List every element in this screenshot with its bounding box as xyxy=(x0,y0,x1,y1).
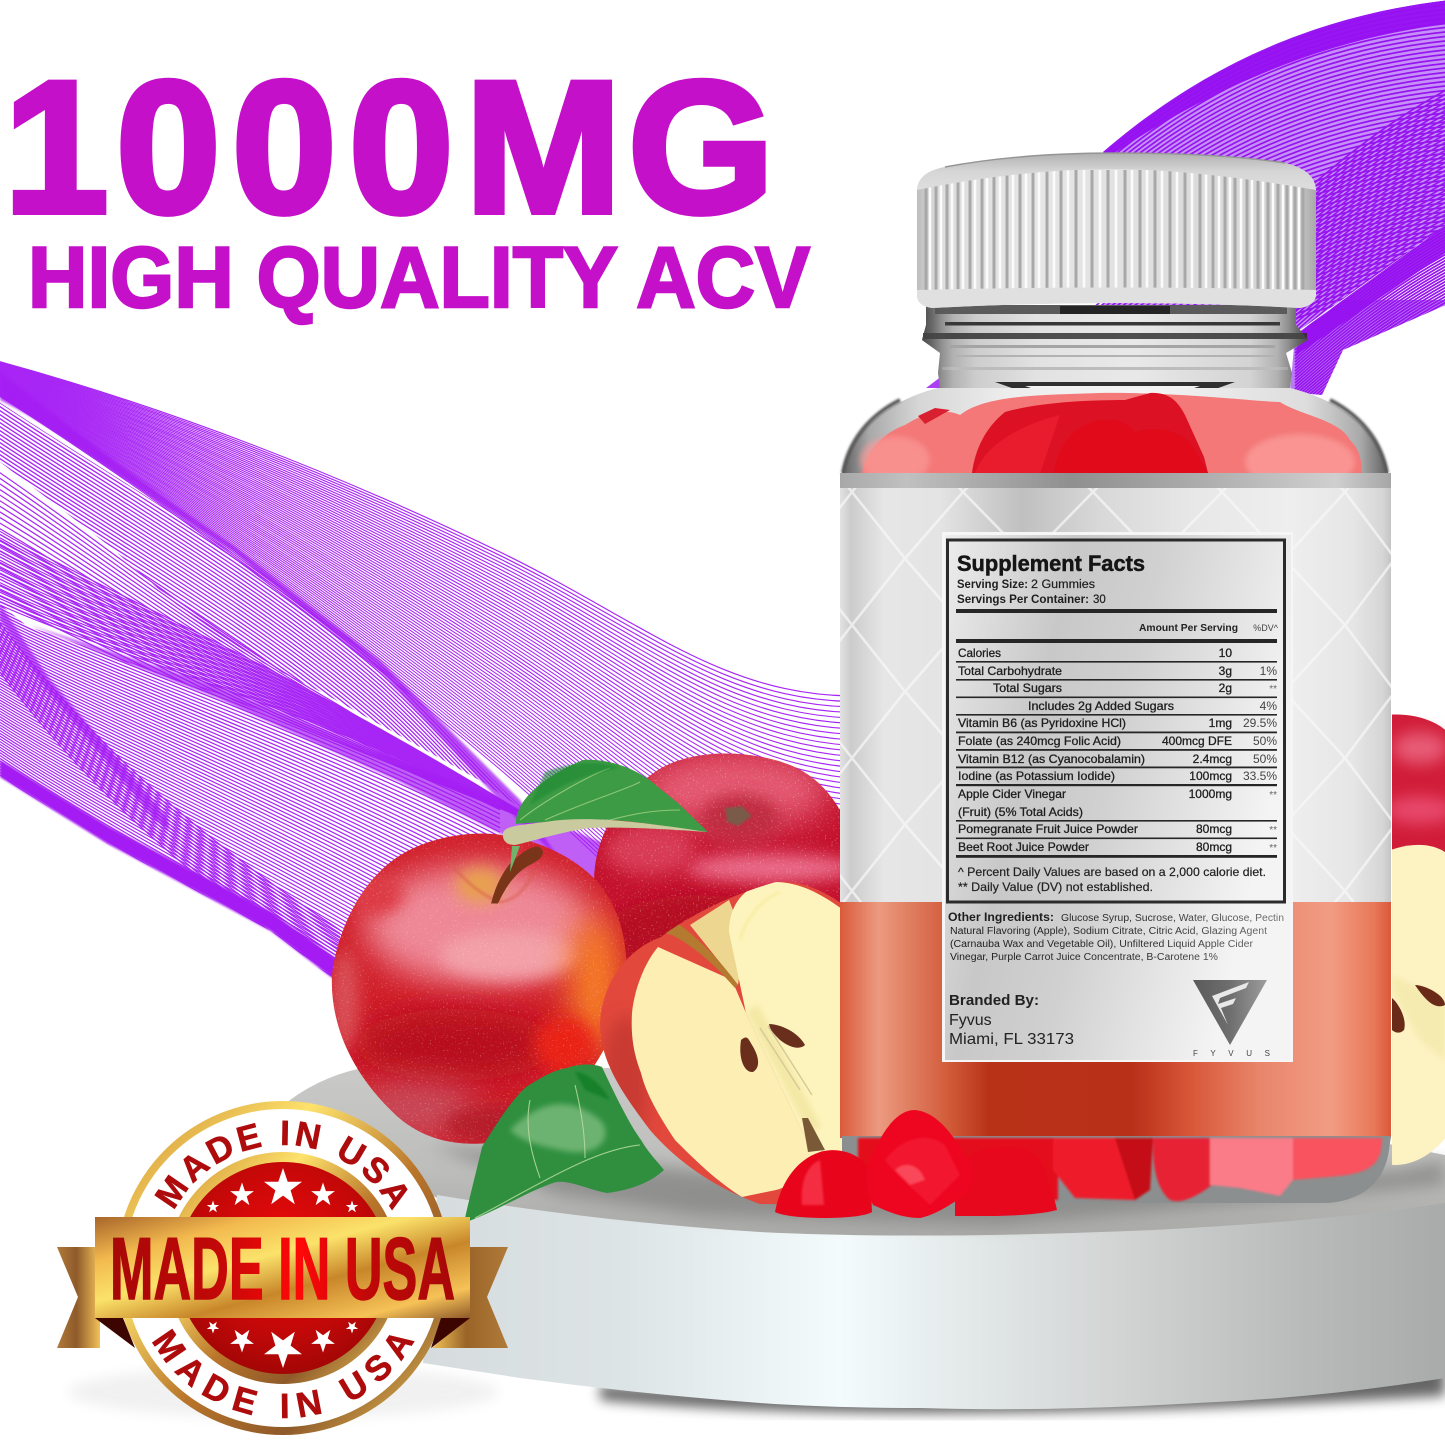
leaf petiole xyxy=(503,819,708,845)
platform shadow xyxy=(600,1365,1445,1413)
label lower colour band xyxy=(840,902,1391,1138)
cap ribs xyxy=(926,170,1303,292)
table rows: 100mcg xyxy=(1189,769,1232,783)
halved apple flesh xyxy=(632,947,813,1197)
branded by: Miami, FL 33173 xyxy=(949,1031,1074,1048)
supplement facts box: 30 xyxy=(1093,594,1106,606)
purple wave ribbons, left xyxy=(0,361,840,980)
table rows: Vitamin B12 (as Cyanocobalamin) xyxy=(958,752,1145,766)
table rows: (Fruit) (5% Total Acids) xyxy=(958,805,1083,819)
table rows: ** xyxy=(1269,843,1277,854)
stem xyxy=(666,924,738,988)
other ingredients: (Carnauba Wax and Vegetable Oil), Unfiltered Liquid Apple Cider xyxy=(950,939,1254,950)
apple: halved apple xyxy=(600,882,842,1204)
title xyxy=(4,42,810,326)
stars xyxy=(207,1168,358,1368)
table rows: 2.4mcg xyxy=(1193,752,1232,766)
right apple seeds xyxy=(1392,998,1405,1033)
core lines xyxy=(752,1008,815,1130)
gummy: right xyxy=(955,1147,1057,1216)
branded by xyxy=(949,993,1074,1048)
badge outer ring xyxy=(116,1101,450,1435)
table rows: Vitamin B6 (as Pyridoxine HCl) xyxy=(958,716,1126,730)
supplement facts box xyxy=(948,540,1284,902)
table rows: ** xyxy=(1269,684,1277,695)
apple speckle xyxy=(594,754,840,959)
subheading: HIGH QUALITY ACV xyxy=(28,230,810,326)
other ingredients: Vinegar, Purple Carrot Juice Concentrate, B-Carotene 1% xyxy=(950,952,1218,963)
table rows: Apple Cider Vinegar xyxy=(958,787,1066,801)
ribbon: lower fold xyxy=(1290,226,1445,395)
ribbon: dense dark folds xyxy=(0,372,620,985)
branded by: Branded By: xyxy=(949,993,1039,1009)
table header: Amount Per Serving xyxy=(1139,623,1238,634)
ribbon: dark top edges xyxy=(926,0,1445,388)
apple: back whole apple xyxy=(594,754,840,960)
cap rim highlights xyxy=(917,153,1316,190)
ribbon: upper band xyxy=(0,359,850,1041)
apple speckle xyxy=(325,825,635,1150)
neck thread highlights xyxy=(922,305,1308,391)
product bottle xyxy=(840,152,1391,1203)
table rows xyxy=(958,646,1277,854)
shoulder edge xyxy=(843,400,1387,473)
ribbon: sparse lens band xyxy=(0,402,520,807)
apple: large whole apple xyxy=(325,825,635,1150)
serving size: Serving Size: xyxy=(957,579,1028,591)
fyvus logo xyxy=(1193,980,1270,1058)
table rows: Beet Root Juice Powder xyxy=(958,840,1089,854)
footnotes xyxy=(958,865,1266,894)
table rows: 2g xyxy=(1219,681,1232,695)
apple seeds xyxy=(740,1038,758,1072)
platform front face xyxy=(423,1195,1445,1409)
table rows: 3g xyxy=(1219,664,1232,678)
right apple flesh xyxy=(1392,844,1445,1165)
gummy: heart centre xyxy=(867,1110,973,1218)
bottom arc text: MADE IN USA xyxy=(152,1328,415,1418)
ribbon tails xyxy=(57,1247,100,1348)
made in usa badge xyxy=(57,1101,508,1435)
glass shoulder xyxy=(842,388,1388,473)
gummies in shoulder xyxy=(857,392,1362,473)
leaf: upper leaf with petiole xyxy=(503,760,708,872)
table rows: ** xyxy=(1269,825,1277,836)
purple wave ribbons, upper right xyxy=(926,0,1445,442)
table rows: 29.5% xyxy=(1243,716,1277,730)
table rows: Total Sugars xyxy=(993,681,1062,695)
platform top surface xyxy=(280,1068,1445,1239)
table rows: 80mcg xyxy=(1196,822,1232,836)
table rows: Pomegranate Fruit Juice Powder xyxy=(958,822,1138,836)
label info panel xyxy=(942,532,1293,1062)
heading: 1000MG: 1000MG xyxy=(4,42,774,252)
other ingredients: Other Ingredients: xyxy=(948,912,1054,924)
table rows: 80mcg xyxy=(1196,840,1232,854)
table rows: 1mg xyxy=(1209,716,1232,730)
table rows: ** xyxy=(1269,790,1277,801)
right apple skin xyxy=(1392,714,1445,852)
leaf: lower leaf xyxy=(464,1064,664,1223)
halved apple skin xyxy=(600,882,840,1204)
cap body xyxy=(917,153,1316,308)
table rules xyxy=(956,609,1277,858)
ribbon: arc underfill xyxy=(1103,0,1445,345)
table rows: 4% xyxy=(1260,699,1277,713)
ribbon: lower band xyxy=(0,605,500,977)
glass neck xyxy=(922,305,1308,388)
top arc text: MADE IN USA xyxy=(154,1120,408,1210)
table rows: 50% xyxy=(1253,752,1277,766)
table rows: 33.5% xyxy=(1243,769,1277,783)
other ingredients: Natural Flavoring (Apple), Sodium Citrate, Citric Acid, Glazing Agent xyxy=(950,926,1267,937)
table rows: Calories xyxy=(958,646,1001,660)
label upper body xyxy=(840,488,1391,902)
fyvus logo: F Y V U S xyxy=(1193,1049,1270,1058)
table rows: Includes 2g Added Sugars xyxy=(1028,699,1174,713)
table rows: 400mcg DFE xyxy=(1162,734,1232,748)
table rows: 10 xyxy=(1219,646,1232,660)
table rows: 1% xyxy=(1260,664,1277,678)
footnotes: ^ Percent Daily Values are based on a 2,000 calorie diet. xyxy=(958,865,1266,879)
table rows: 1000mg xyxy=(1189,787,1232,801)
badge inner ring xyxy=(167,1152,399,1384)
other ingredients: Glucose Syrup, Sucrose, Water, Glucose, Pectin xyxy=(1061,913,1284,924)
ribbon text: MADE IN USA xyxy=(110,1219,455,1318)
servings per container: Servings Per Container: xyxy=(957,594,1089,606)
label top band xyxy=(840,473,1391,489)
apple dimple xyxy=(725,806,752,826)
branded by: Fyvus xyxy=(949,1012,992,1029)
ribbon: main arc xyxy=(1096,0,1445,330)
table rows: Folate (as 240mcg Folic Acid) xyxy=(958,734,1121,748)
ribbon folds xyxy=(95,1318,135,1348)
supplement facts box: 2 Gummies xyxy=(1031,579,1095,591)
supplement facts heading: Supplement Facts xyxy=(957,551,1145,576)
label diamond pattern xyxy=(840,488,1391,902)
gummies: foreground pile xyxy=(775,1110,1057,1218)
supplement facts box: %DV^ xyxy=(1253,623,1279,633)
table rows: 50% xyxy=(1253,734,1277,748)
ribbon: centre crosshatch xyxy=(0,472,518,816)
gummy: dome xyxy=(775,1150,872,1218)
table rows: Total Carbohydrate xyxy=(958,664,1062,678)
jar base glass xyxy=(842,1136,1391,1203)
table rows: Iodine (as Potassium Iodide) xyxy=(958,769,1115,783)
other ingredients xyxy=(948,912,1284,963)
bottom calyx xyxy=(802,1118,825,1152)
apple stem xyxy=(493,848,541,902)
platform pedestal xyxy=(280,1068,1445,1413)
apple: right side, behind bottle xyxy=(1392,714,1445,1165)
gummies in jar base xyxy=(858,1138,1382,1201)
shadow beneath objects xyxy=(430,1145,1445,1225)
badge shadow xyxy=(68,1366,498,1418)
ribbon main band xyxy=(95,1217,470,1318)
apple dimple xyxy=(456,867,504,903)
footnotes: ** Daily Value (DV) not established. xyxy=(958,880,1153,894)
